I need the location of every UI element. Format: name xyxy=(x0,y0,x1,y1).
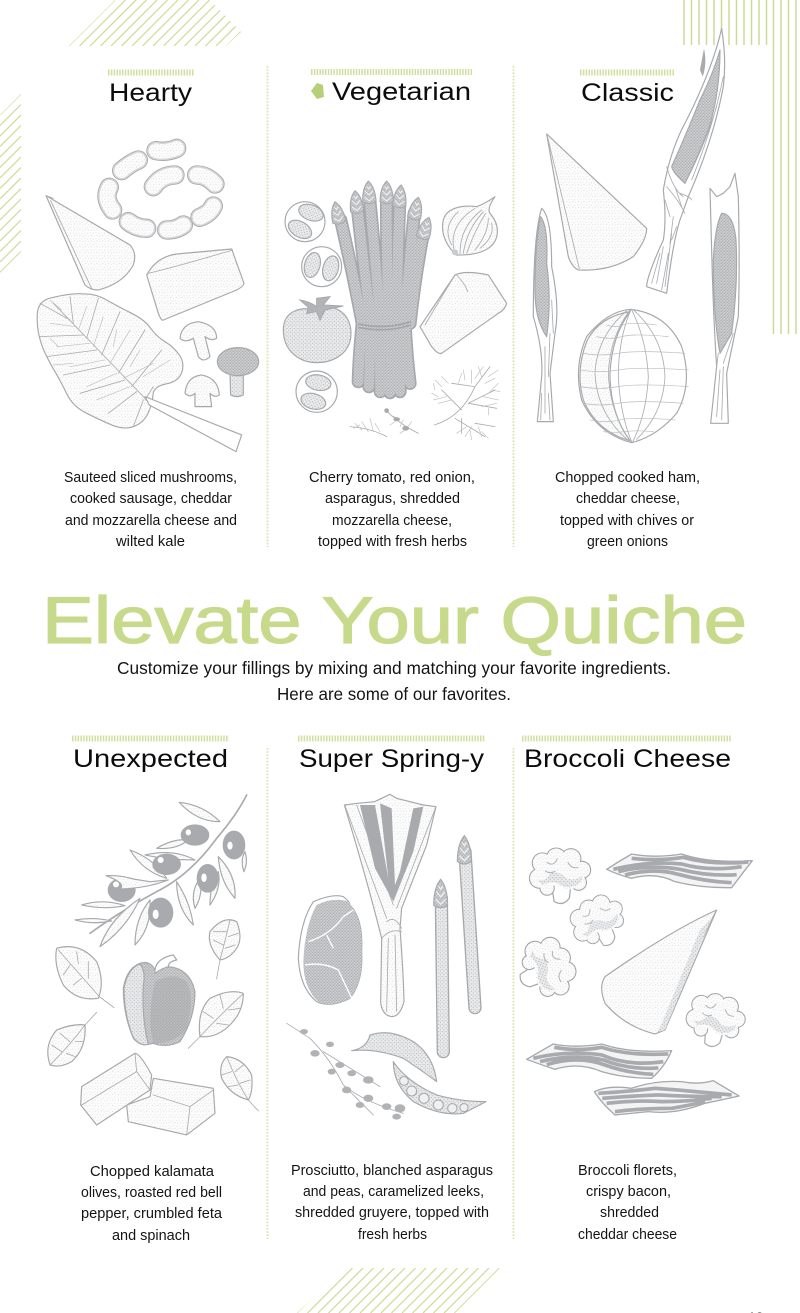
panel: Classic xyxy=(533,28,739,550)
heading: Broccoli Cheese xyxy=(524,745,731,773)
subtitle xyxy=(117,658,671,704)
subtitle: Customize your fillings by mixing and matching your favorite ingredients. xyxy=(117,658,671,678)
heading: Hearty xyxy=(109,79,193,107)
icon: asparagus spears xyxy=(434,836,475,1052)
decorative stripes: top left xyxy=(69,0,241,46)
icon: small green onion xyxy=(533,208,557,422)
description: pepper, crumbled feta xyxy=(81,1206,223,1222)
description: Cherry tomato, red onion, xyxy=(309,470,475,486)
icon: broccoli florets xyxy=(508,847,750,1052)
heading rule xyxy=(580,70,674,76)
description: wilted kale xyxy=(115,534,185,550)
description xyxy=(291,1163,493,1243)
icon: pea pods xyxy=(352,1033,486,1114)
icon: olive branch xyxy=(75,795,247,947)
icon: whole tomato xyxy=(283,297,351,363)
icon: mushrooms xyxy=(180,322,259,407)
description: topped with fresh herbs xyxy=(318,534,467,550)
heading rule xyxy=(298,736,485,742)
icon: prosciutto xyxy=(298,896,362,1004)
description: cheddar cheese, xyxy=(576,491,680,507)
icon: cheese wedge xyxy=(46,196,135,290)
description: topped with chives or xyxy=(560,513,694,529)
description: mozzarella cheese, xyxy=(332,513,452,529)
panel: Unexpected xyxy=(48,738,258,1244)
icon: onion xyxy=(443,197,497,255)
illustration: hearty ingredients xyxy=(37,148,259,452)
illustration: unexpected ingredients xyxy=(48,795,258,1135)
icon: cheese block xyxy=(147,249,244,320)
description: Broccoli florets, xyxy=(578,1163,677,1179)
icon: tomato slices xyxy=(285,201,342,412)
description: olives, roasted red bell xyxy=(81,1185,222,1201)
column dividers xyxy=(268,66,514,1239)
heading: Classic xyxy=(581,79,674,107)
icon: cheese wedge xyxy=(602,910,717,1034)
description: cheddar cheese xyxy=(578,1227,677,1243)
illustration: broccoli cheese ingredients xyxy=(508,847,752,1115)
heading rule xyxy=(108,70,194,76)
description xyxy=(309,470,475,550)
icon: cheese wedge xyxy=(547,134,647,270)
illustration: vegetarian ingredients xyxy=(283,181,507,440)
illustration: classic ingredients xyxy=(533,28,739,443)
description: Chopped kalamata xyxy=(90,1164,215,1180)
icon: dill sprig xyxy=(432,367,500,440)
panel: Hearty xyxy=(37,72,259,550)
icon: leek xyxy=(344,794,436,1017)
icon: cheese block xyxy=(420,272,507,354)
icon: spinach leaves xyxy=(48,920,258,1111)
description: shredded xyxy=(600,1205,659,1221)
icon: feta cubes xyxy=(81,1053,215,1135)
heading rule xyxy=(522,736,732,742)
description xyxy=(64,470,237,550)
icon: kale leaf xyxy=(37,294,242,452)
icon: herb sprig xyxy=(287,1023,405,1120)
description: shredded gruyere, topped with xyxy=(295,1205,489,1221)
icon: leaf arrow xyxy=(311,83,324,99)
description: cooked sausage, cheddar xyxy=(70,491,232,507)
illustration: spring ingredients xyxy=(287,794,486,1120)
icon: artichoke xyxy=(578,309,688,443)
subtitle: Here are some of our favorites. xyxy=(277,684,511,704)
heading: Vegetarian xyxy=(332,78,471,106)
decorative stripes: left edge xyxy=(0,94,21,272)
heading rule xyxy=(311,69,472,75)
description: Prosciutto, blanched asparagus xyxy=(291,1163,493,1179)
decorative stripes: bottom xyxy=(297,1268,500,1313)
description: asparagus, shredded xyxy=(325,491,460,507)
description: crispy bacon, xyxy=(586,1184,671,1200)
description: Sauteed sliced mushrooms, xyxy=(64,470,237,486)
icon: bacon strips xyxy=(527,854,752,1115)
description: fresh herbs xyxy=(358,1227,427,1243)
icon: asparagus bunch xyxy=(328,181,435,393)
icon: bell pepper xyxy=(123,955,195,1045)
description xyxy=(578,1163,677,1243)
decorative stripes: top right xyxy=(684,0,796,334)
heading rule xyxy=(72,736,229,742)
icon: green onion right xyxy=(710,173,739,423)
panel: Super Spring-y xyxy=(287,738,493,1243)
description: Chopped cooked ham, xyxy=(555,470,700,486)
icon: small herbs xyxy=(350,408,418,437)
description: green onions xyxy=(587,534,668,550)
description: and mozzarella cheese and xyxy=(65,513,237,529)
icon: large green onion xyxy=(647,28,725,293)
heading: Unexpected xyxy=(73,745,228,773)
description xyxy=(81,1164,223,1244)
icon: sausage links xyxy=(107,148,215,230)
heading: Super Spring-y xyxy=(299,745,485,773)
description xyxy=(555,470,700,550)
description: and spinach xyxy=(112,1228,190,1244)
description: and peas, caramelized leeks, xyxy=(303,1184,484,1200)
title: Elevate Your Quiche xyxy=(42,583,747,657)
panel: Broccoli Cheese xyxy=(508,738,752,1243)
panel: Vegetarian xyxy=(283,72,507,550)
